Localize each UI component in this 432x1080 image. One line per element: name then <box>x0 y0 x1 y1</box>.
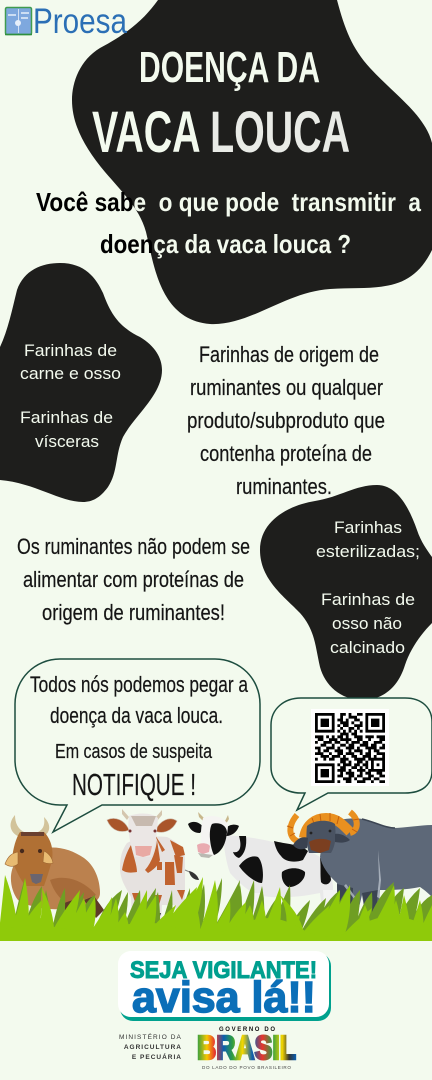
blob: main black title shape <box>72 0 432 324</box>
text: ruminant feed warning: alimentar com proteínas de <box>23 567 244 592</box>
question heading <box>36 187 421 259</box>
logo: Governo do Brasil: DO LADO DO POVO BRASILEIRO <box>202 1065 291 1070</box>
text: ruminant flours <box>187 342 385 499</box>
text: farinhas prohibited: vísceras <box>35 432 99 451</box>
logo: Proesa: Proesa <box>33 2 127 41</box>
bubble text <box>30 672 249 802</box>
text: ruminant feed warning: Os ruminantes não podem se <box>17 534 250 559</box>
text: ruminant flours: contenha proteína de <box>200 441 372 466</box>
logo: Governo do Brasil: GOVERNO DO <box>219 1027 275 1033</box>
text: farinhas permitted: Farinhas de <box>321 590 415 609</box>
bubble text: doença da vaca louca. <box>50 703 223 728</box>
text: ruminant flours: ruminantes. <box>236 474 332 499</box>
bubble text: Todos nós podemos pegar a <box>30 672 249 697</box>
logo: Proesa <box>5 2 127 41</box>
QR code <box>311 709 389 786</box>
logo: Ministério da Agricultura e Pecuária: MINISTÉRIO DA <box>119 1032 182 1041</box>
text: ruminant flours: ruminantes ou qualquer <box>190 375 383 400</box>
text: farinhas permitted: Farinhas <box>334 518 402 537</box>
text: farinhas permitted: calcinado <box>330 638 405 657</box>
logo: Ministério da Agricultura e Pecuária: AGRICULTURA <box>124 1044 182 1051</box>
text: ruminant flours: produto/subproduto que <box>187 408 385 433</box>
logo: Ministério da Agricultura e Pecuária: E PECUÁRIA <box>132 1052 182 1061</box>
logo: Seja Vigilante avisa lá <box>118 951 331 1022</box>
blob: left black shape <box>0 263 162 502</box>
bubble text: NOTIFIQUE ! <box>72 767 196 802</box>
illustration: black and white cow <box>188 812 339 921</box>
logo: Seja Vigilante avisa lá: avisa lá!! <box>132 973 316 1022</box>
speech bubble: QR code <box>271 698 432 810</box>
text: ruminant feed warning: origem de ruminantes! <box>42 600 225 625</box>
speech bubble: notify <box>15 659 260 832</box>
text: farinhas prohibited: Farinhas de <box>24 341 117 360</box>
illustration: brown resting ox <box>5 815 104 918</box>
text: farinhas permitted: osso não <box>332 614 402 633</box>
question heading: doença da vaca louca ? <box>100 229 351 259</box>
text: farinhas permitted: esterilizadas; <box>316 542 420 561</box>
text: farinhas prohibited <box>20 341 121 451</box>
blob: right black shape <box>260 485 432 700</box>
text: farinhas prohibited: Farinhas de <box>20 408 113 427</box>
bubble text: Em casos de suspeita <box>55 741 213 763</box>
title <box>92 43 350 165</box>
text: ruminant flours: Farinhas de origem de <box>199 342 379 367</box>
title: VACA LOUCA <box>92 100 350 165</box>
illustration: grass <box>0 875 432 941</box>
illustration: water buffalo <box>287 812 432 933</box>
logo: Seja Vigilante avisa lá: SEJA VIGILANTE! <box>130 957 317 984</box>
text: farinhas permitted <box>316 518 420 657</box>
illustration: brown and white cow <box>107 809 199 925</box>
title: DOENÇA DA <box>139 43 320 92</box>
text: farinhas prohibited: carne e osso <box>20 364 121 383</box>
text: ruminant feed warning <box>17 534 250 625</box>
logo: Ministério da Agricultura e Pecuária <box>119 1032 182 1061</box>
logo: Governo do Brasil: BRASIL <box>197 1029 296 1066</box>
